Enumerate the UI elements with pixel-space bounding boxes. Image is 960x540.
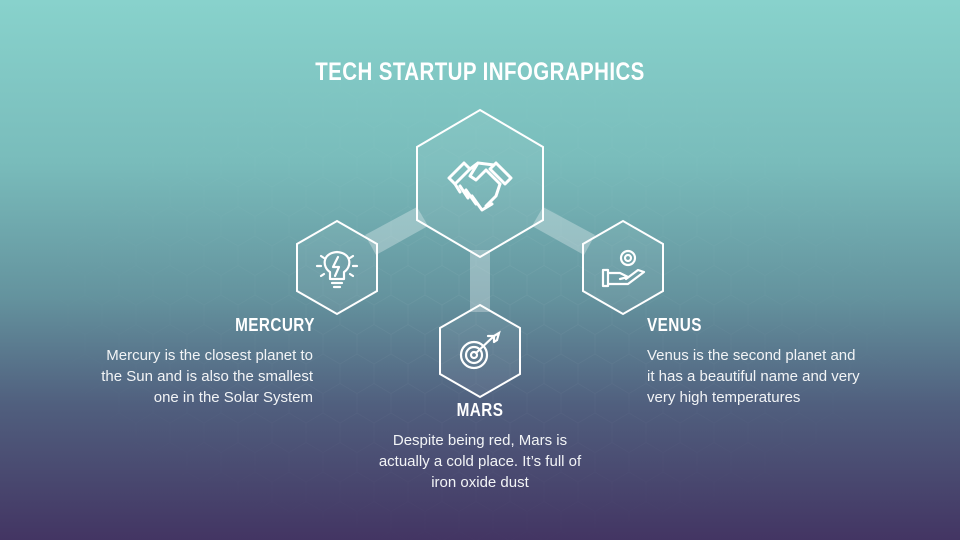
hexagon: mercury (297, 221, 377, 314)
icon: hand with coin (603, 251, 644, 286)
text: mercury (101, 347, 313, 406)
text: mars: actually a cold place. It’s full of (379, 453, 581, 470)
icon: target (461, 333, 499, 368)
text: mercury: the Sun and is also the smallest (101, 368, 313, 385)
icon: handshake (449, 163, 511, 210)
connector: left (365, 207, 428, 255)
text: mercury: one in the Solar System (154, 389, 313, 406)
title: TECH STARTUP INFOGRAPHICS (315, 58, 645, 86)
icon: lightbulb (317, 252, 357, 287)
text: venus (647, 347, 860, 406)
hexagon: center (417, 110, 543, 257)
heading: mercury: MERCURY (235, 315, 315, 335)
text: venus: very high temperatures (647, 389, 800, 406)
heading: mars: MARS (457, 400, 503, 420)
text: mars: Despite being red, Mars is (393, 432, 567, 449)
text: mars: iron oxide dust (431, 474, 529, 491)
heading: venus: VENUS (647, 315, 702, 335)
text: mars (379, 432, 582, 491)
connector: right (532, 207, 595, 255)
hexagon: venus (583, 221, 663, 314)
text: venus: Venus is the second planet and (647, 347, 856, 364)
text: mercury: Mercury is the closest planet to (106, 347, 313, 364)
text: venus: it has a beautiful name and very (647, 368, 860, 385)
hexagon: mars (440, 305, 520, 397)
connector: middle (470, 250, 490, 312)
